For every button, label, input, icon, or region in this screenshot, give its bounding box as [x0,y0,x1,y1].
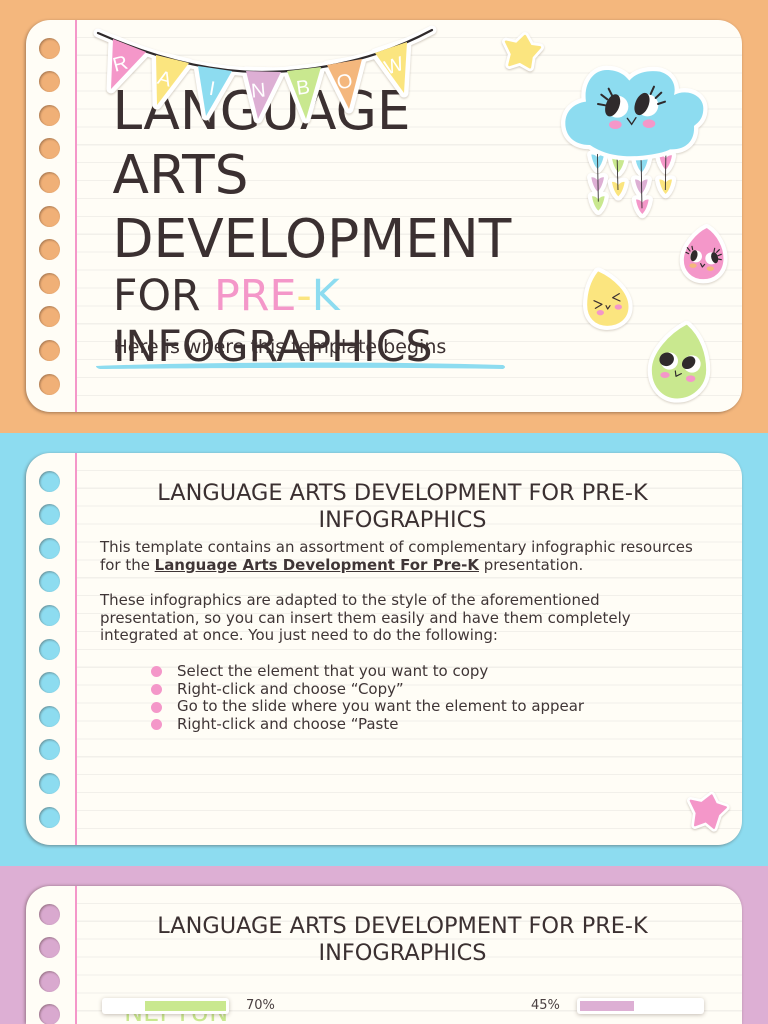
cloud body [565,70,703,156]
cloud face [598,87,665,129]
intro paragraph: This template contains an assortment of complementary infographic resources [100,538,693,556]
bunting: rainbow: A [155,67,174,92]
instructions paragraph: integrated at once. You just need to do the following: [100,626,498,644]
instructions paragraph: These infographics are adapted to the style of the aforementioned [100,591,600,609]
heading: page 3 [157,913,648,966]
progress bar: 45% [577,998,704,1014]
subtitle: for pre-k [113,271,433,372]
intro paragraph [100,538,693,574]
intro paragraph: for the Language Arts Development For Pre-K presentation. [100,556,583,574]
bullet list: Select the element that you want to copy [177,662,488,680]
title: ARTS [112,144,249,206]
heading: page 3: INFOGRAPHICS [319,940,486,966]
yellow drop [588,272,628,325]
instructions paragraph [100,591,631,644]
hanging hearts [591,146,672,214]
subtitle: for pre-k: INFOGRAPHICS [113,322,433,372]
bullet list: Go to the slide where you want the element to appear [177,697,584,715]
bunting: rainbow: O [335,70,355,95]
value: 70%: 70% [246,998,275,1013]
bunting: rainbow: I [207,78,217,100]
panel: notebook page 2 [26,453,742,845]
tagline: Here is where this template begins [114,336,446,358]
binder holes [39,471,60,828]
subtitle: for pre-k: FOR PRE-K [113,271,340,321]
panel: notebook page 3 [26,886,742,1024]
title [112,80,512,270]
heading: page 2 [157,480,648,533]
binder holes [39,904,60,1024]
background band: orange [0,0,768,433]
bullet list [151,662,584,733]
bunting: rainbow: W [382,53,407,80]
bullet list: Right-click and choose “Copy” [177,680,404,698]
heading: page 2: LANGUAGE ARTS DEVELOPMENT FOR PRE-K [157,480,648,506]
bunting: rainbow: B [295,76,311,100]
green drop [653,326,705,398]
bullet list: Right-click and choose “Paste [177,715,398,733]
value: 45%: 45% [531,998,560,1013]
instructions paragraph: presentation, so you can insert them easily and have them completely [100,609,631,627]
title: LANGUAGE [112,80,411,142]
binder holes [39,38,60,395]
pink drop [685,229,723,278]
bunting: rainbow: N [250,79,267,103]
bunting: rainbow: R [111,52,130,77]
background band: purple [0,866,768,1024]
progress bar: 70% [102,998,229,1014]
panel: notebook page 1 [26,20,742,412]
background band: blue [0,433,768,866]
heading: page 2: INFOGRAPHICS [319,507,486,533]
heading: page 3: LANGUAGE ARTS DEVELOPMENT FOR PRE-K [157,913,648,939]
title: DEVELOPMENT [112,208,511,270]
